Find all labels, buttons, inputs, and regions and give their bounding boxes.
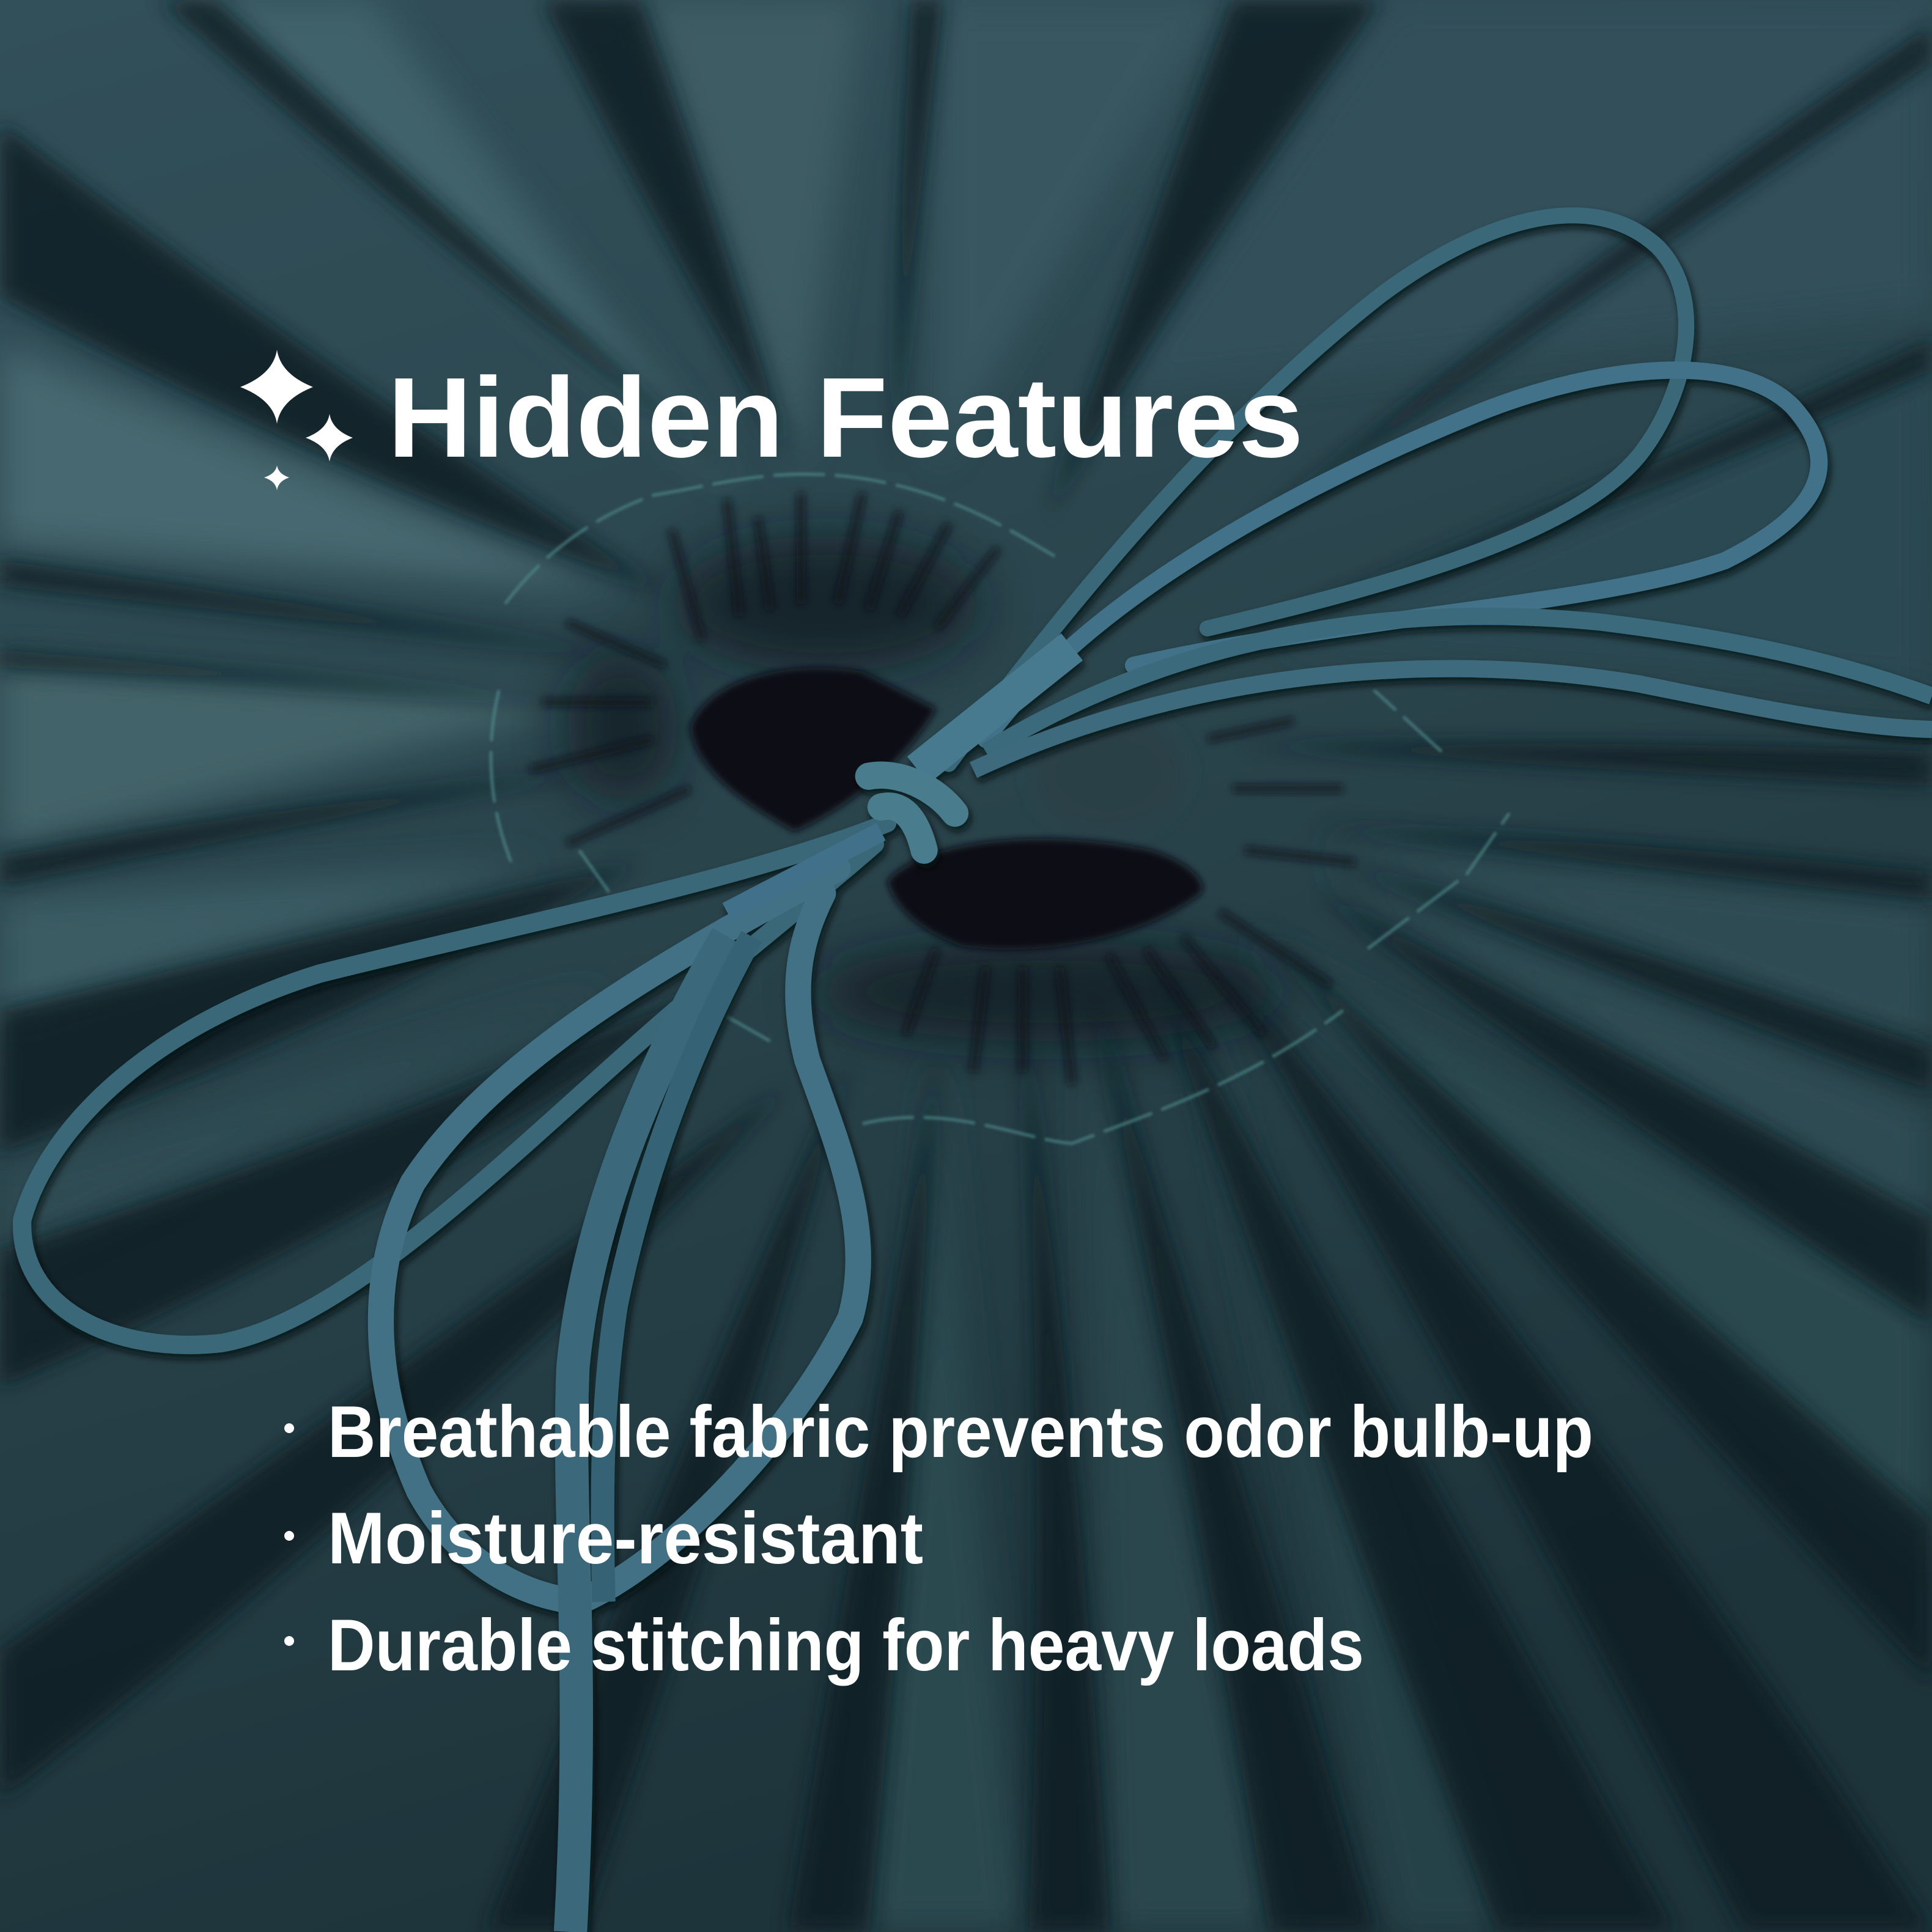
feature: moisture-resistant: Moisture-resistant — [328, 1497, 923, 1579]
cord: right ends — [986, 616, 1932, 751]
bullet 1 — [284, 1423, 294, 1433]
cord: top loop — [949, 215, 1686, 764]
stitching lines — [491, 474, 1510, 1143]
bullet 2 — [284, 1531, 294, 1541]
cord: lower loop — [381, 869, 858, 1602]
feature: durable stitching: Durable stitching for heavy loads — [328, 1604, 1364, 1686]
title: Hidden Features — [388, 355, 1303, 481]
feature list — [284, 1391, 1593, 1686]
shaded gathers around the openings — [567, 536, 1281, 1041]
cord: gathered bundle at the knot — [918, 647, 1072, 770]
cord: left loop — [22, 823, 887, 1345]
cord: right loop — [986, 370, 1819, 739]
bullet 3 — [284, 1636, 294, 1646]
icon: large sparkle — [240, 350, 313, 424]
gathered pleats around the openings — [530, 493, 1355, 1084]
feature: breathable fabric: Breathable fabric prevents odor bulb-up — [328, 1391, 1593, 1473]
icon: medium sparkle — [306, 414, 353, 462]
icon: sparkles — [240, 350, 353, 490]
inner fabric patch between the openings — [1033, 715, 1185, 833]
strap: hanging tail — [570, 937, 727, 1932]
icon: small sparkle — [264, 465, 289, 490]
drawstring openings — [690, 668, 1203, 949]
knot — [869, 775, 955, 850]
cord: left bundle at the knot — [727, 831, 881, 912]
